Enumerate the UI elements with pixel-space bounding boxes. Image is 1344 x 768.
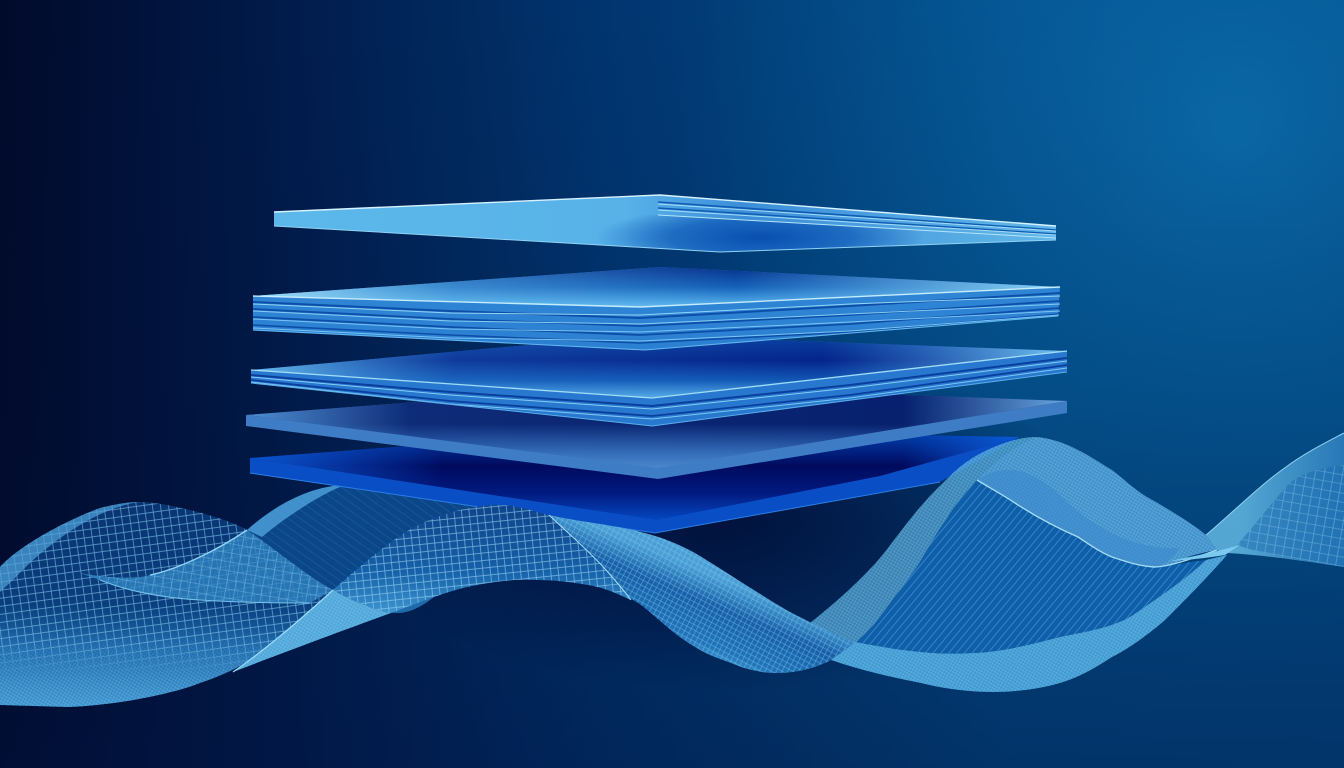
- layer 2: thick stacked sheets: [253, 267, 1060, 350]
- layer 1: top light sheet: [274, 195, 1056, 252]
- small shadow blob under the crossing: [388, 597, 434, 613]
- rear wave ribbon behind the stack: [247, 485, 515, 590]
- wave: rising strand of right hump: [810, 437, 1036, 642]
- layer 3: thin stacked sheets: [251, 335, 1067, 426]
- wave: dark mesh belly of right hump: [856, 480, 1206, 654]
- wave: crest fold of right hump: [977, 437, 1217, 567]
- layer 4: slate blue sheet: [246, 385, 1067, 479]
- wave: right strand rising off the page: [1170, 433, 1344, 567]
- wave: centre mesh ribbon: [233, 505, 856, 673]
- wave: bottom sweep of right hump: [831, 555, 1227, 692]
- layer 5: deep blue sheet: [250, 430, 1020, 533]
- wave: left mesh hump: [0, 502, 333, 707]
- wave: bright inner fold on left hump: [80, 530, 333, 603]
